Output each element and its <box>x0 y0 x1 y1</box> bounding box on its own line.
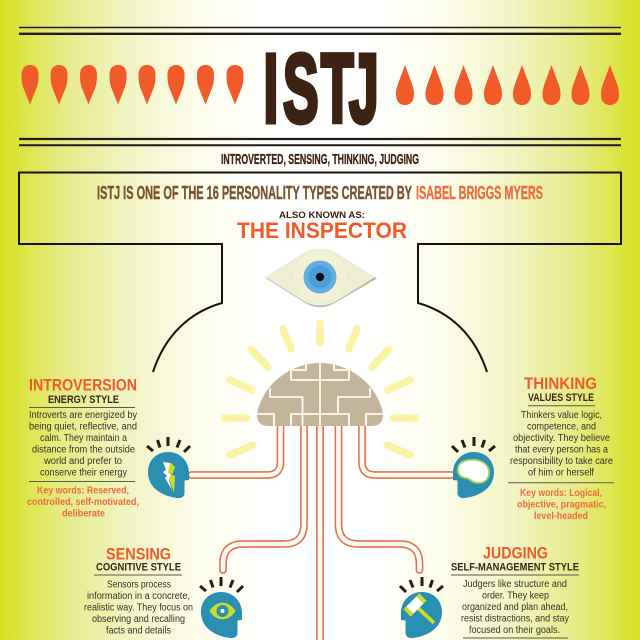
panel: introversion: Key words: Reserved, <box>37 486 129 496</box>
panel: sensing: information in a concrete, <box>87 591 190 602</box>
nickname: THE INSPECTOR <box>237 218 407 243</box>
header rules <box>19 28 621 145</box>
panel: introversion: Introverts are energized by <box>29 410 137 421</box>
wires <box>192 424 452 640</box>
panel: thinking: that every person has a <box>515 444 608 456</box>
panel: thinking: objectivity. They believe <box>513 433 610 444</box>
panel: thinking: objective, pragmatic, <box>517 500 606 510</box>
panel: introversion: distance from the outside <box>32 444 135 456</box>
panel: thinking <box>508 374 614 522</box>
panel: sensing: SENSING <box>106 544 171 564</box>
panel: thinking: THINKING <box>524 374 597 393</box>
panel: judging: JUDGING <box>483 544 548 563</box>
panel: introversion: INTROVERSION <box>29 376 137 394</box>
icon: head with gavel <box>400 577 443 638</box>
panel: judging <box>451 544 579 638</box>
panel: introversion: conserve their energy <box>40 468 127 478</box>
panel: thinking: responsibility to take care <box>510 456 613 467</box>
panel: sensing: facts and details <box>106 626 171 636</box>
panel: introversion <box>27 376 139 520</box>
panel: judging: resist distractions, and stay <box>461 614 569 624</box>
panel: thinking: VALUES STYLE <box>528 392 594 404</box>
icon: eye <box>265 248 377 307</box>
drops: right row <box>396 65 619 105</box>
drops: left row <box>22 65 244 104</box>
icon: head with lightning <box>147 437 190 498</box>
panel: sensing: realistic way. They focus on <box>84 602 193 614</box>
panel: introversion: world and prefer to <box>43 456 122 467</box>
panel: thinking: competence, and <box>527 422 596 432</box>
panel: sensing <box>84 544 193 636</box>
panel: judging: organized and plan ahead, <box>462 602 568 613</box>
panel: introversion: ENERGY STYLE <box>48 394 119 406</box>
panel: judging: Judgers like structure and <box>463 579 567 590</box>
panel: sensing: Sensors process <box>107 580 171 590</box>
panel: sensing: observing and recalling <box>92 614 185 625</box>
icon: circuit brain <box>257 363 383 426</box>
panel: judging: focused on their goals. <box>469 625 560 636</box>
panel: thinking: of him or herself <box>528 468 594 478</box>
panel: introversion: controlled, self-motivated, <box>27 497 139 508</box>
also known as: ALSO KNOWN AS: <box>279 210 365 221</box>
panel: sensing: COGNITIVE STYLE <box>96 562 181 574</box>
title: ISTJ <box>263 34 379 143</box>
panel: thinking: Thinkers value logic, <box>521 410 602 421</box>
icon: head with brain <box>452 437 495 498</box>
brain rays <box>224 323 416 455</box>
panel: judging: order. They keep <box>482 590 549 602</box>
panel: introversion: being quiet, reflective, and <box>29 422 137 432</box>
panel: introversion: deliberate <box>62 508 105 520</box>
frame outline <box>19 172 621 372</box>
panel: thinking: Key words: Logical, <box>520 488 602 499</box>
intro line: ISTJ IS ONE OF THE 16 PERSONALITY TYPES CREATED BY <box>97 183 412 203</box>
panel: thinking: level-headed <box>534 511 588 522</box>
subtitle: INTROVERTED, SENSING, THINKING, JUDGING <box>221 151 419 168</box>
intro line: ISABEL BRIGGS MYERS <box>416 183 543 203</box>
panel: introversion: calm. They maintain a <box>40 433 127 444</box>
panel: judging: SELF-MANAGEMENT STYLE <box>451 562 579 574</box>
icon: head with eye <box>200 577 243 638</box>
